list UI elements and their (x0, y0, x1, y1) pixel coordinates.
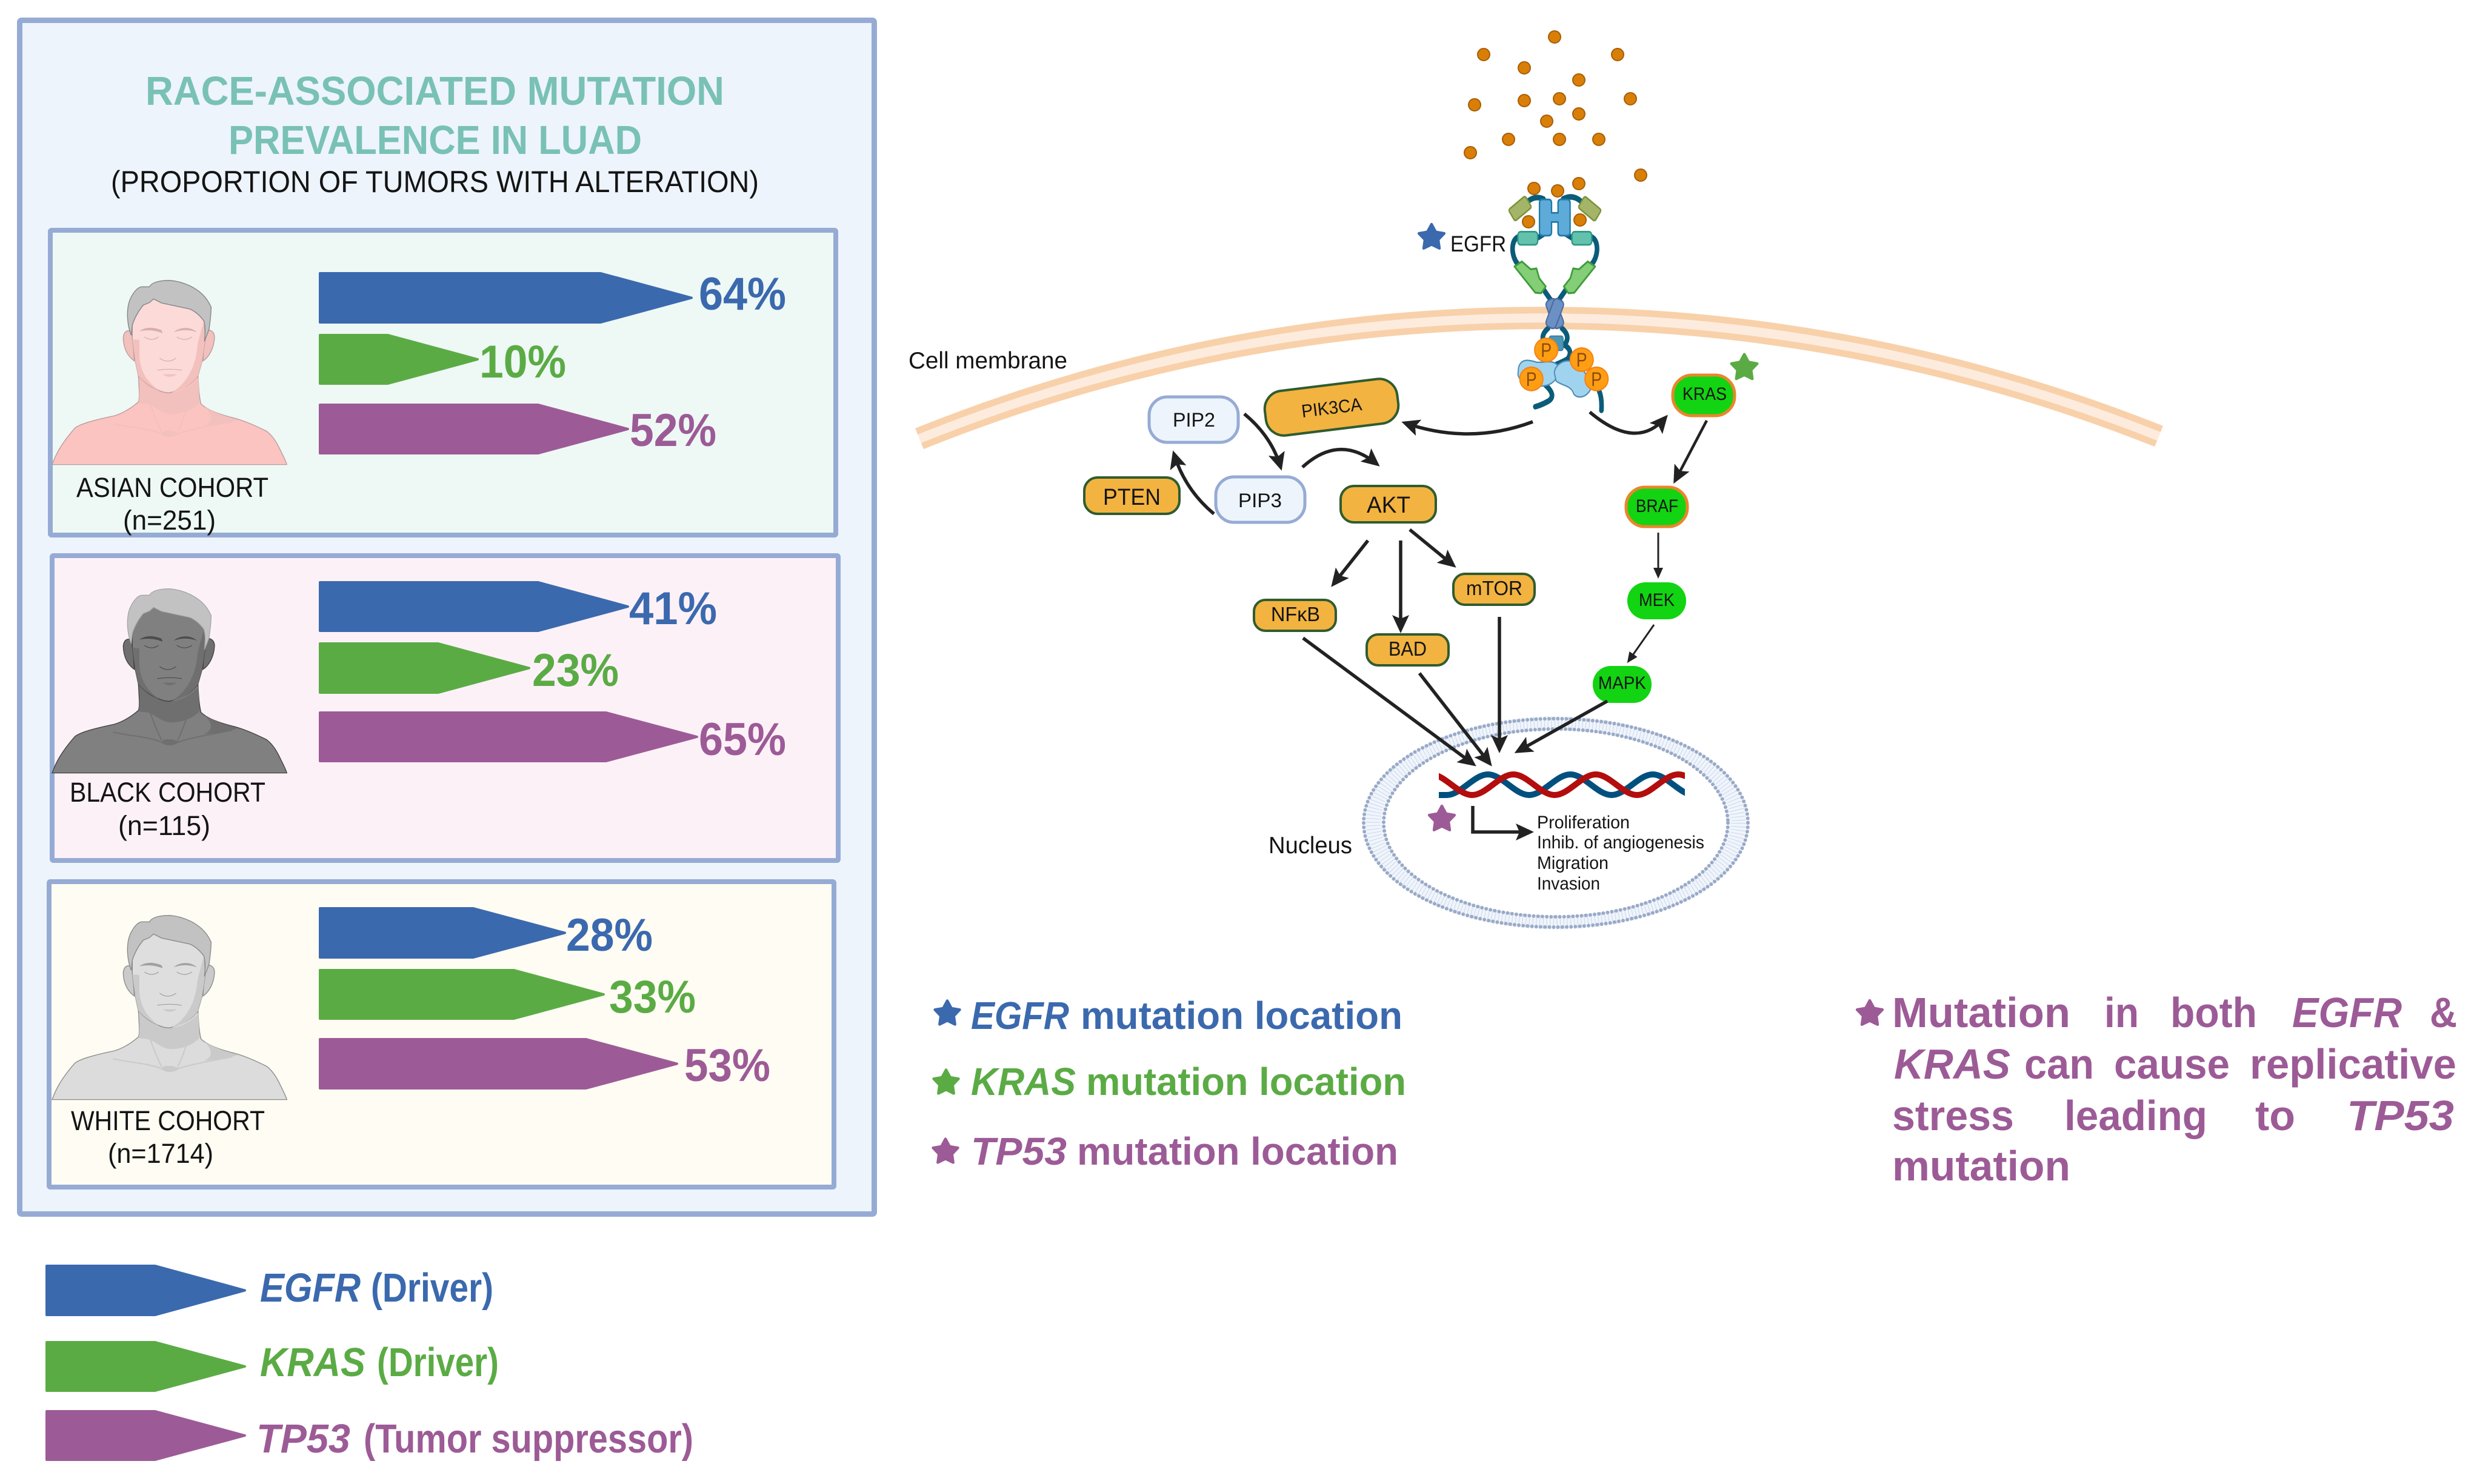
arrow: AKT to mTOR (1410, 530, 1453, 565)
node: PIP2: PIP2 (1173, 409, 1215, 431)
title: RACE-ASSOCIATED MUTATION (145, 68, 724, 114)
EGFR receptor (1509, 196, 1608, 410)
bar: Asian EGFR 64% (320, 268, 786, 322)
node: NFkB (1254, 600, 1336, 631)
arrow: EGFR to PIK3CA (1405, 422, 1533, 434)
bar: White TP53 53%: 53% (684, 1040, 770, 1091)
arrow: mTOR to DNA (1498, 617, 1501, 750)
arrow: KRAS to BRAF (1675, 421, 1707, 481)
node: MAPK: MAPK (1598, 673, 1646, 693)
key item: KRAS (933, 1060, 1406, 1103)
cohort label: Black: (n=115) (118, 810, 210, 841)
panel: Black cohort (52, 556, 838, 860)
key item: TP53: TP53 (971, 1130, 1067, 1173)
node: BRAF: BRAF (1636, 496, 1678, 516)
outcomes text (1537, 813, 1704, 894)
note: replicative stress: & (2430, 989, 2457, 1036)
bar: White KRAS 33% (320, 970, 696, 1023)
key item: TP53: mutation location (1077, 1130, 1398, 1173)
bar: Black KRAS 23% (320, 644, 619, 696)
node: NFkB: NFκB (1271, 603, 1320, 625)
arrow: AKT to BAD (1399, 541, 1402, 630)
outcomes text: Invasion (1537, 874, 1600, 894)
key: mutation locations (933, 994, 1406, 1173)
legend: gene arrows (47, 1265, 693, 1462)
key item: EGFR: EGFR (971, 994, 1069, 1037)
panel: Asian cohort (50, 230, 836, 536)
key item: EGFR (935, 994, 1402, 1037)
note: replicative stress: in (2104, 989, 2139, 1036)
cohort label: Asian: ASIAN COHORT (76, 472, 268, 503)
arrow: PIP2 to PIP3 (1244, 414, 1281, 467)
bar: White EGFR 28% (320, 908, 653, 961)
arrow: MEK to MAPK (1629, 625, 1654, 661)
subtitle: (PROPORTION OF TUMORS WITH ALTERATION) (111, 165, 759, 199)
bar: White TP53 53% (320, 1039, 770, 1091)
node: PTEN (1084, 477, 1179, 514)
title (145, 68, 724, 163)
label: cell membrane: Cell membrane (909, 348, 1067, 374)
legend item: EGFR driver: (Driver) (371, 1265, 493, 1311)
note: replicative stress: replicative (2250, 1040, 2456, 1088)
legend item: TP53 tumor suppressor (47, 1411, 693, 1462)
icon: Asian person (52, 281, 287, 465)
node: PIK3CA: PIK3CA (1301, 394, 1363, 422)
arrow: NFkB to DNA (1303, 638, 1473, 764)
node: PIP2 (1149, 397, 1238, 442)
note: replicative stress: TP53 (2347, 1092, 2454, 1139)
phospho groups: P (1591, 369, 1602, 390)
cohort label: White: WHITE COHORT (71, 1105, 265, 1136)
node: MEK (1627, 582, 1686, 619)
label: EGFR: EGFR (1450, 231, 1506, 256)
nucleus (1362, 717, 1750, 929)
panel: White cohort (49, 882, 834, 1187)
cohort label: Asian (76, 472, 268, 536)
legend item: KRAS driver: KRAS (260, 1340, 365, 1385)
node: AKT: AKT (1367, 493, 1410, 518)
bar: Asian TP53 52%: 52% (630, 405, 716, 456)
phospho groups (1520, 338, 1608, 391)
legend item: KRAS driver (47, 1340, 499, 1391)
cohort label: White (71, 1105, 265, 1169)
legend item: TP53 tumor suppressor: (Tumor suppressor) (364, 1416, 693, 1462)
outcomes text: Migration (1537, 853, 1609, 873)
phospho groups: P (1541, 340, 1552, 362)
legend item: TP53 tumor suppressor: TP53 (256, 1416, 350, 1462)
node: mTOR (1453, 574, 1535, 605)
node: BAD (1367, 634, 1449, 665)
arrow: BAD to DNA (1419, 673, 1490, 764)
outcomes text: Proliferation (1537, 813, 1630, 833)
arrow: PIP3 to AKT (1302, 450, 1377, 467)
icon: White person (52, 916, 287, 1100)
icon: Black person (52, 589, 287, 773)
key item: KRAS: KRAS (971, 1060, 1076, 1103)
node: MEK: MEK (1639, 590, 1675, 610)
arrow: transcription (1473, 806, 1530, 832)
note: replicative stress: both (2170, 989, 2257, 1036)
note: replicative stress: leading (2064, 1092, 2207, 1139)
bar: White EGFR 28%: 28% (566, 910, 653, 961)
bar: Asian KRAS 10%: 10% (479, 336, 566, 388)
bar: Asian TP53 52% (320, 405, 716, 456)
arrow: BRAF to MEK (1657, 533, 1659, 576)
bar: Asian KRAS 10% (320, 335, 566, 388)
note: replicative stress: EGFR (2292, 989, 2402, 1036)
star: KRAS mutation location (1732, 354, 1757, 379)
cohort label: Black (70, 777, 265, 841)
bar: Black EGFR 41% (320, 582, 717, 634)
node: MAPK (1593, 666, 1652, 703)
cohort label: White: (n=1714) (108, 1138, 213, 1169)
key item: KRAS: mutation location (1086, 1060, 1406, 1103)
node: BAD: BAD (1389, 637, 1427, 660)
bar: Black TP53 65%: 65% (699, 714, 786, 765)
note: replicative stress (1857, 989, 2457, 1190)
note: replicative stress: to (2255, 1092, 2295, 1139)
note: replicative stress: stress (1892, 1092, 2014, 1139)
cohort label: Asian: (n=251) (123, 505, 216, 536)
key item: EGFR: mutation location (1081, 994, 1402, 1037)
note: replicative stress: cause (2114, 1040, 2230, 1088)
phospho groups: P (1576, 350, 1587, 371)
panel: race-associated mutation prevalence (19, 21, 874, 1214)
legend item: EGFR driver: EGFR (260, 1265, 361, 1311)
note: replicative stress: can (2024, 1040, 2094, 1088)
arrow: EGFR to KRAS (1590, 412, 1665, 433)
bar: Black TP53 65% (320, 713, 786, 765)
node: KRAS (1673, 375, 1735, 416)
bar: Black KRAS 23%: 23% (532, 645, 619, 696)
outcomes text: Inhib. of angiogenesis (1537, 833, 1704, 853)
arrow: AKT to NFkB (1333, 541, 1368, 584)
DNA helix (1430, 774, 1719, 795)
node: mTOR: mTOR (1466, 577, 1522, 599)
star: EGFR mutation location (1419, 224, 1444, 248)
key item: TP53 (933, 1130, 1398, 1173)
bar: Black EGFR 41%: 41% (629, 583, 717, 634)
note: replicative stress: Mutation (1892, 989, 2070, 1036)
note: replicative stress: mutation (1892, 1142, 2070, 1190)
bar: White KRAS 33%: 33% (609, 971, 696, 1023)
node: PIP3 (1216, 477, 1305, 522)
node: PIP3: PIP3 (1238, 490, 1282, 511)
node: PTEN: PTEN (1103, 485, 1161, 510)
legend item: KRAS driver: (Driver) (377, 1340, 499, 1385)
cell membrane (919, 318, 2159, 439)
node: KRAS: KRAS (1682, 384, 1727, 404)
cohort label: Black: BLACK COHORT (70, 777, 265, 808)
title: PREVALENCE IN LUAD (228, 118, 642, 163)
label: nucleus: Nucleus (1269, 833, 1352, 859)
bar: Asian EGFR 64%: 64% (699, 268, 786, 320)
note: replicative stress: KRAS (1894, 1040, 2010, 1088)
arrow: MAPK to DNA (1518, 701, 1607, 751)
arrow: PIP3 to PIP2 (1174, 454, 1214, 514)
node: AKT (1341, 486, 1436, 522)
star: TP53 mutation location (1429, 806, 1455, 830)
EGF ligand dots (1464, 31, 1647, 228)
legend item: EGFR driver (47, 1265, 493, 1315)
node: BRAF (1626, 487, 1687, 527)
node: PIK3CA (1262, 377, 1401, 438)
phospho groups: P (1526, 369, 1537, 390)
